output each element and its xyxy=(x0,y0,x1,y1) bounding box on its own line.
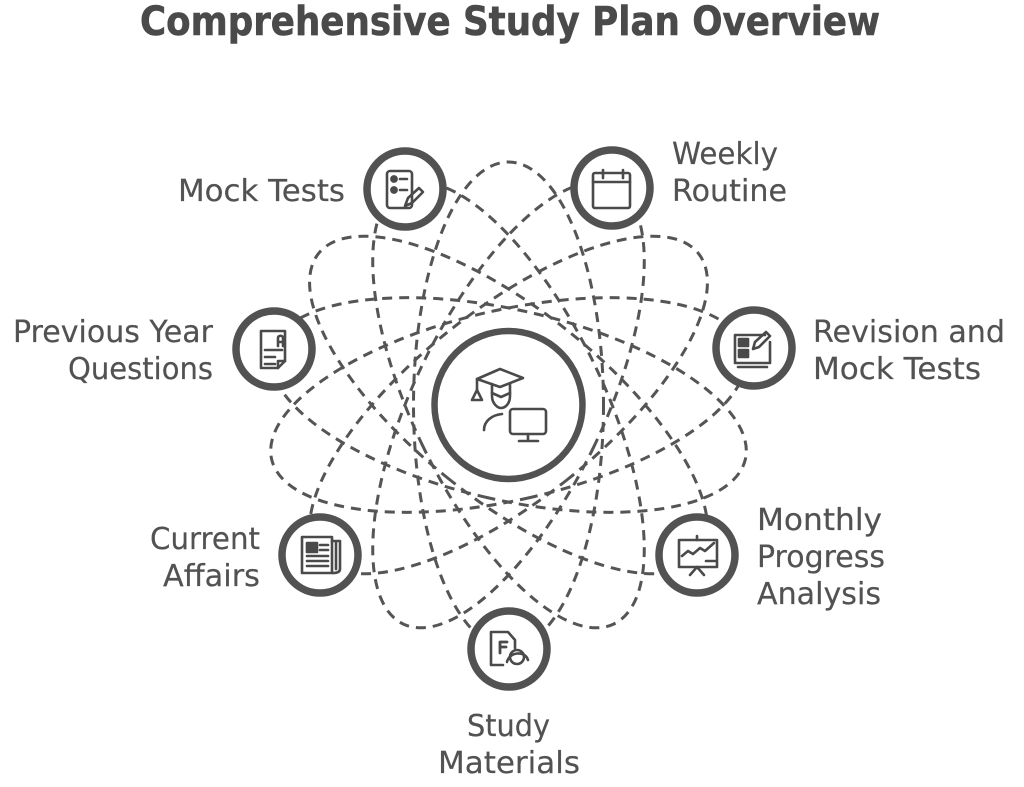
icon: document with magnifier xyxy=(491,632,528,665)
central hub: student and computer xyxy=(434,331,582,479)
node: Current Affairs xyxy=(282,517,358,593)
icon: newspaper xyxy=(302,537,340,573)
label: Monthly Progress Analysis xyxy=(757,503,885,612)
node: Weekly Routine xyxy=(574,150,650,226)
label: Current Affairs: Affairs xyxy=(163,559,260,594)
dashed orbit ellipses xyxy=(250,145,767,665)
node: Revision and Mock Tests xyxy=(716,310,792,386)
icon: graduate with monitor xyxy=(472,369,546,441)
node: Previous Year Questions xyxy=(236,311,312,387)
icon: test sheet and pencil xyxy=(387,171,423,208)
label: Previous Year Questions xyxy=(13,315,214,387)
label: Weekly Routine xyxy=(672,137,787,209)
label: Weekly Routine: Weekly xyxy=(672,137,778,172)
icon: monitor and pencil xyxy=(735,332,770,367)
label: Current Affairs xyxy=(150,522,260,594)
node: Monthly Progress Analysis xyxy=(659,517,735,593)
label: Previous Year Questions: Questions xyxy=(68,352,213,387)
icon: calendar xyxy=(593,170,630,208)
label: Monthly Progress Analysis: Analysis xyxy=(757,577,881,612)
label: Revision and Mock Tests xyxy=(813,315,1005,387)
label: Revision and Mock Tests: Mock Tests xyxy=(813,352,981,387)
label: Current Affairs: Current xyxy=(150,522,260,557)
label: Monthly Progress Analysis: Monthly xyxy=(757,503,882,538)
label: Weekly Routine: Routine xyxy=(672,174,787,209)
node: Mock Tests xyxy=(367,151,443,227)
node: Study Materials xyxy=(471,611,547,687)
icon: presentation board with chart xyxy=(679,536,717,575)
label: Mock Tests: Mock Tests xyxy=(178,174,345,209)
label: Revision and Mock Tests: Revision and xyxy=(813,315,1005,350)
label: Study Materials xyxy=(438,709,580,781)
title: Comprehensive Study Plan Overview xyxy=(140,0,880,45)
label: Previous Year Questions: Previous Year xyxy=(13,315,214,350)
label: Study Materials: Study xyxy=(467,709,550,744)
label: Monthly Progress Analysis: Progress xyxy=(757,540,885,575)
icon: question paper xyxy=(261,331,285,368)
label: Study Materials: Materials xyxy=(438,746,580,781)
